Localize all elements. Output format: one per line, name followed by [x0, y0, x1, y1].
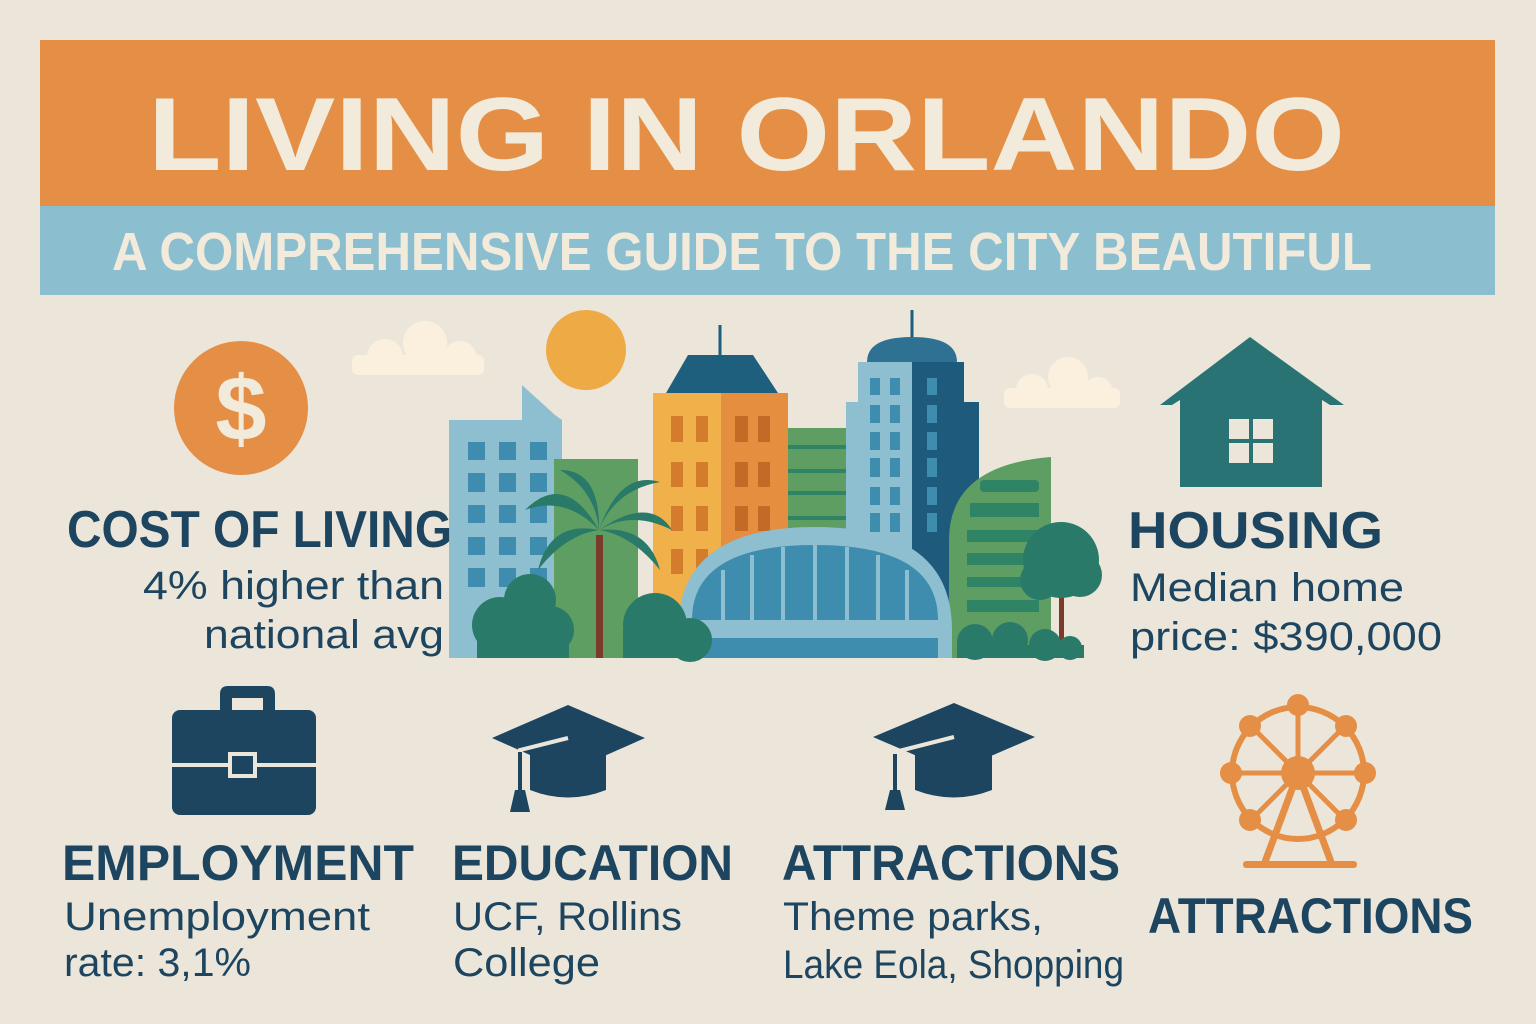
housing text: [1128, 502, 1442, 659]
education text: [452, 835, 733, 985]
cost of living text: COST OF LIVING: [67, 501, 452, 559]
arch bridge: [678, 527, 952, 658]
employment text: EMPLOYMENT: [62, 835, 414, 891]
cloud right: [1004, 357, 1120, 408]
tree right: [1020, 522, 1102, 658]
subtitle: A COMPREHENSIVE GUIDE TO THE CITY BEAUTIFUL: [112, 222, 1372, 282]
cost of living text: 4% higher than: [143, 564, 444, 608]
orange tower: [653, 325, 788, 623]
attractions text: [782, 835, 1124, 987]
housing text: price: $390,000: [1130, 615, 1442, 659]
title: LIVING IN ORLANDO: [148, 77, 1345, 193]
attractions text: Lake Eola, Shopping: [783, 943, 1124, 987]
attractions label right: ATTRACTIONS: [1148, 888, 1473, 944]
icon: house: [1160, 337, 1344, 487]
icon: graduation cap 2: [873, 703, 1035, 810]
attractions text: ATTRACTIONS: [782, 835, 1120, 891]
cost of living text: [67, 501, 452, 657]
education text: EDUCATION: [452, 835, 733, 891]
employment text: rate: 3,1%: [64, 941, 251, 985]
bushes: [472, 574, 1084, 662]
housing text: HOUSING: [1128, 502, 1383, 560]
icon: ferris wheel: [1220, 694, 1376, 868]
title banner: [40, 40, 1495, 206]
employment text: [62, 835, 414, 985]
employment text: Unemployment: [64, 895, 370, 939]
icon: dollar coin: $: [215, 358, 267, 460]
housing text: Median home: [1130, 566, 1404, 610]
cloud left: [352, 321, 484, 375]
green mid building: [788, 428, 846, 640]
green rounded building: [949, 457, 1051, 658]
education text: College: [453, 941, 600, 985]
green building: [554, 459, 638, 658]
education text: UCF, Rollins: [453, 895, 682, 939]
subtitle band: [40, 206, 1495, 295]
left light-blue building: [449, 385, 562, 658]
palm tree: [525, 470, 672, 658]
city skyline illustration: [352, 310, 1120, 662]
attractions text: Theme parks,: [783, 895, 1043, 939]
tall blue tower: [846, 310, 979, 640]
icon: briefcase: [172, 686, 316, 815]
icon: dollar coin: [174, 341, 308, 475]
icon: graduation cap 1: [492, 705, 645, 812]
cost of living text: national avg: [204, 613, 444, 657]
sun: [546, 310, 626, 390]
